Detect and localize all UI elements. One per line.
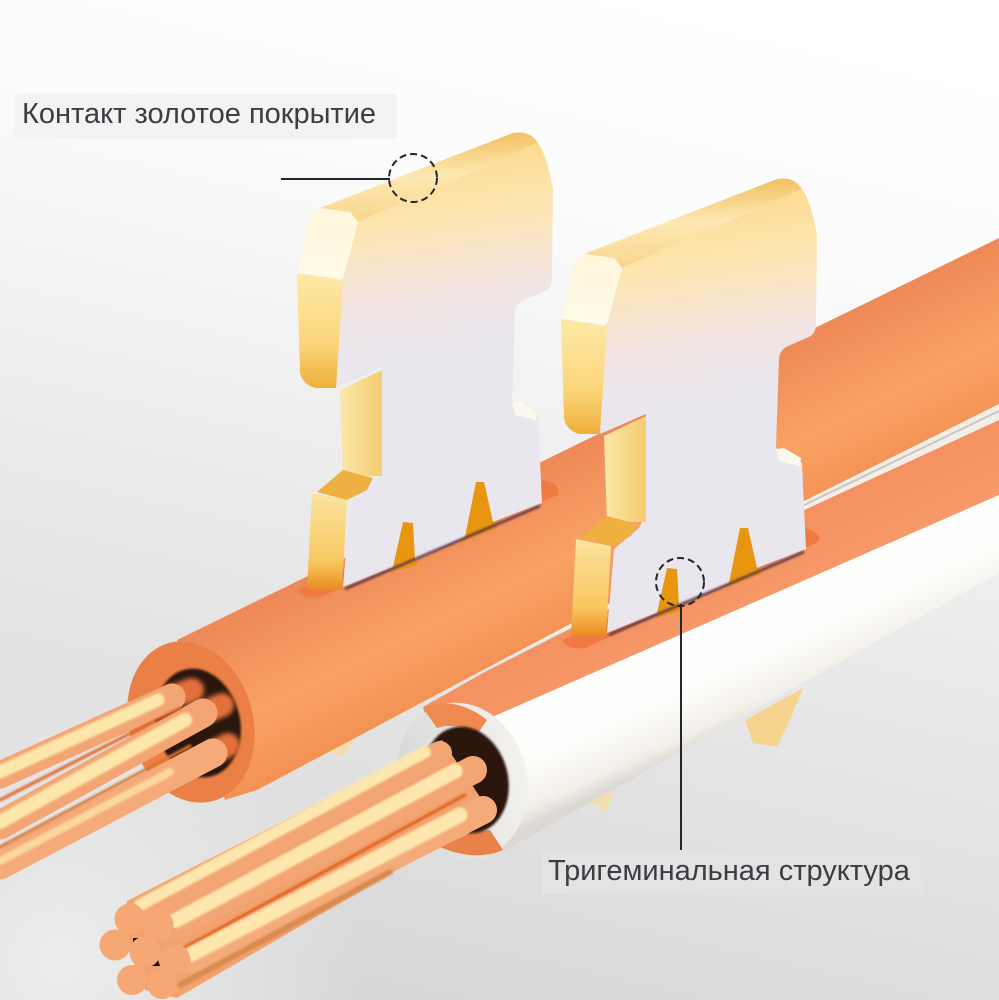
white wire: [380, 495, 999, 873]
label: gold coating: [15, 94, 397, 139]
strand ends: [100, 904, 190, 999]
label: trigeminal structure: [541, 850, 925, 895]
gap stripe between wires: [483, 402, 999, 670]
right gold contact: [561, 178, 817, 636]
label: gold coating: Контакт золотое покрытие: [22, 98, 376, 130]
leader line: trigeminal structure: [656, 558, 704, 850]
left contact teeth: [391, 480, 497, 572]
strands of white wire: [120, 740, 492, 998]
left contact slot: [298, 480, 559, 598]
strands of left wire: [0, 690, 228, 865]
leader line: gold coating: [281, 154, 437, 202]
right contact pale side: [561, 254, 622, 324]
right contact slot: [562, 528, 819, 648]
gold tips under wires: [323, 688, 803, 811]
orange wire end ring: [109, 626, 273, 818]
left contact column: [340, 370, 382, 476]
bundle body: [120, 740, 492, 998]
white wire end ring: [380, 689, 544, 873]
left contact top band: [320, 132, 538, 222]
left contact gold side: [297, 273, 343, 388]
right contact top band: [584, 178, 802, 268]
right contact foot: [571, 539, 611, 636]
ring orange top: [423, 704, 487, 733]
right contact nub: [776, 448, 801, 466]
left contact front face: [336, 143, 553, 587]
right contact column: [604, 416, 646, 522]
right contact front face: [600, 189, 817, 633]
left gold contact: [297, 132, 553, 590]
label: trigeminal structure: Тригеминальная структура: [548, 855, 911, 887]
left contact pale side: [297, 208, 358, 278]
left contact blob: [317, 470, 373, 500]
right contact blob: [581, 516, 637, 546]
orange wire: [109, 238, 999, 818]
ring orange bottom: [440, 830, 503, 855]
right contact teeth: [655, 526, 761, 618]
left contact nub: [512, 402, 537, 420]
right contact gold side: [561, 319, 607, 434]
orange wire bore: [144, 659, 252, 787]
white wire bore: [412, 717, 520, 843]
left contact foot: [307, 493, 347, 590]
white wire orange band: [423, 420, 999, 800]
